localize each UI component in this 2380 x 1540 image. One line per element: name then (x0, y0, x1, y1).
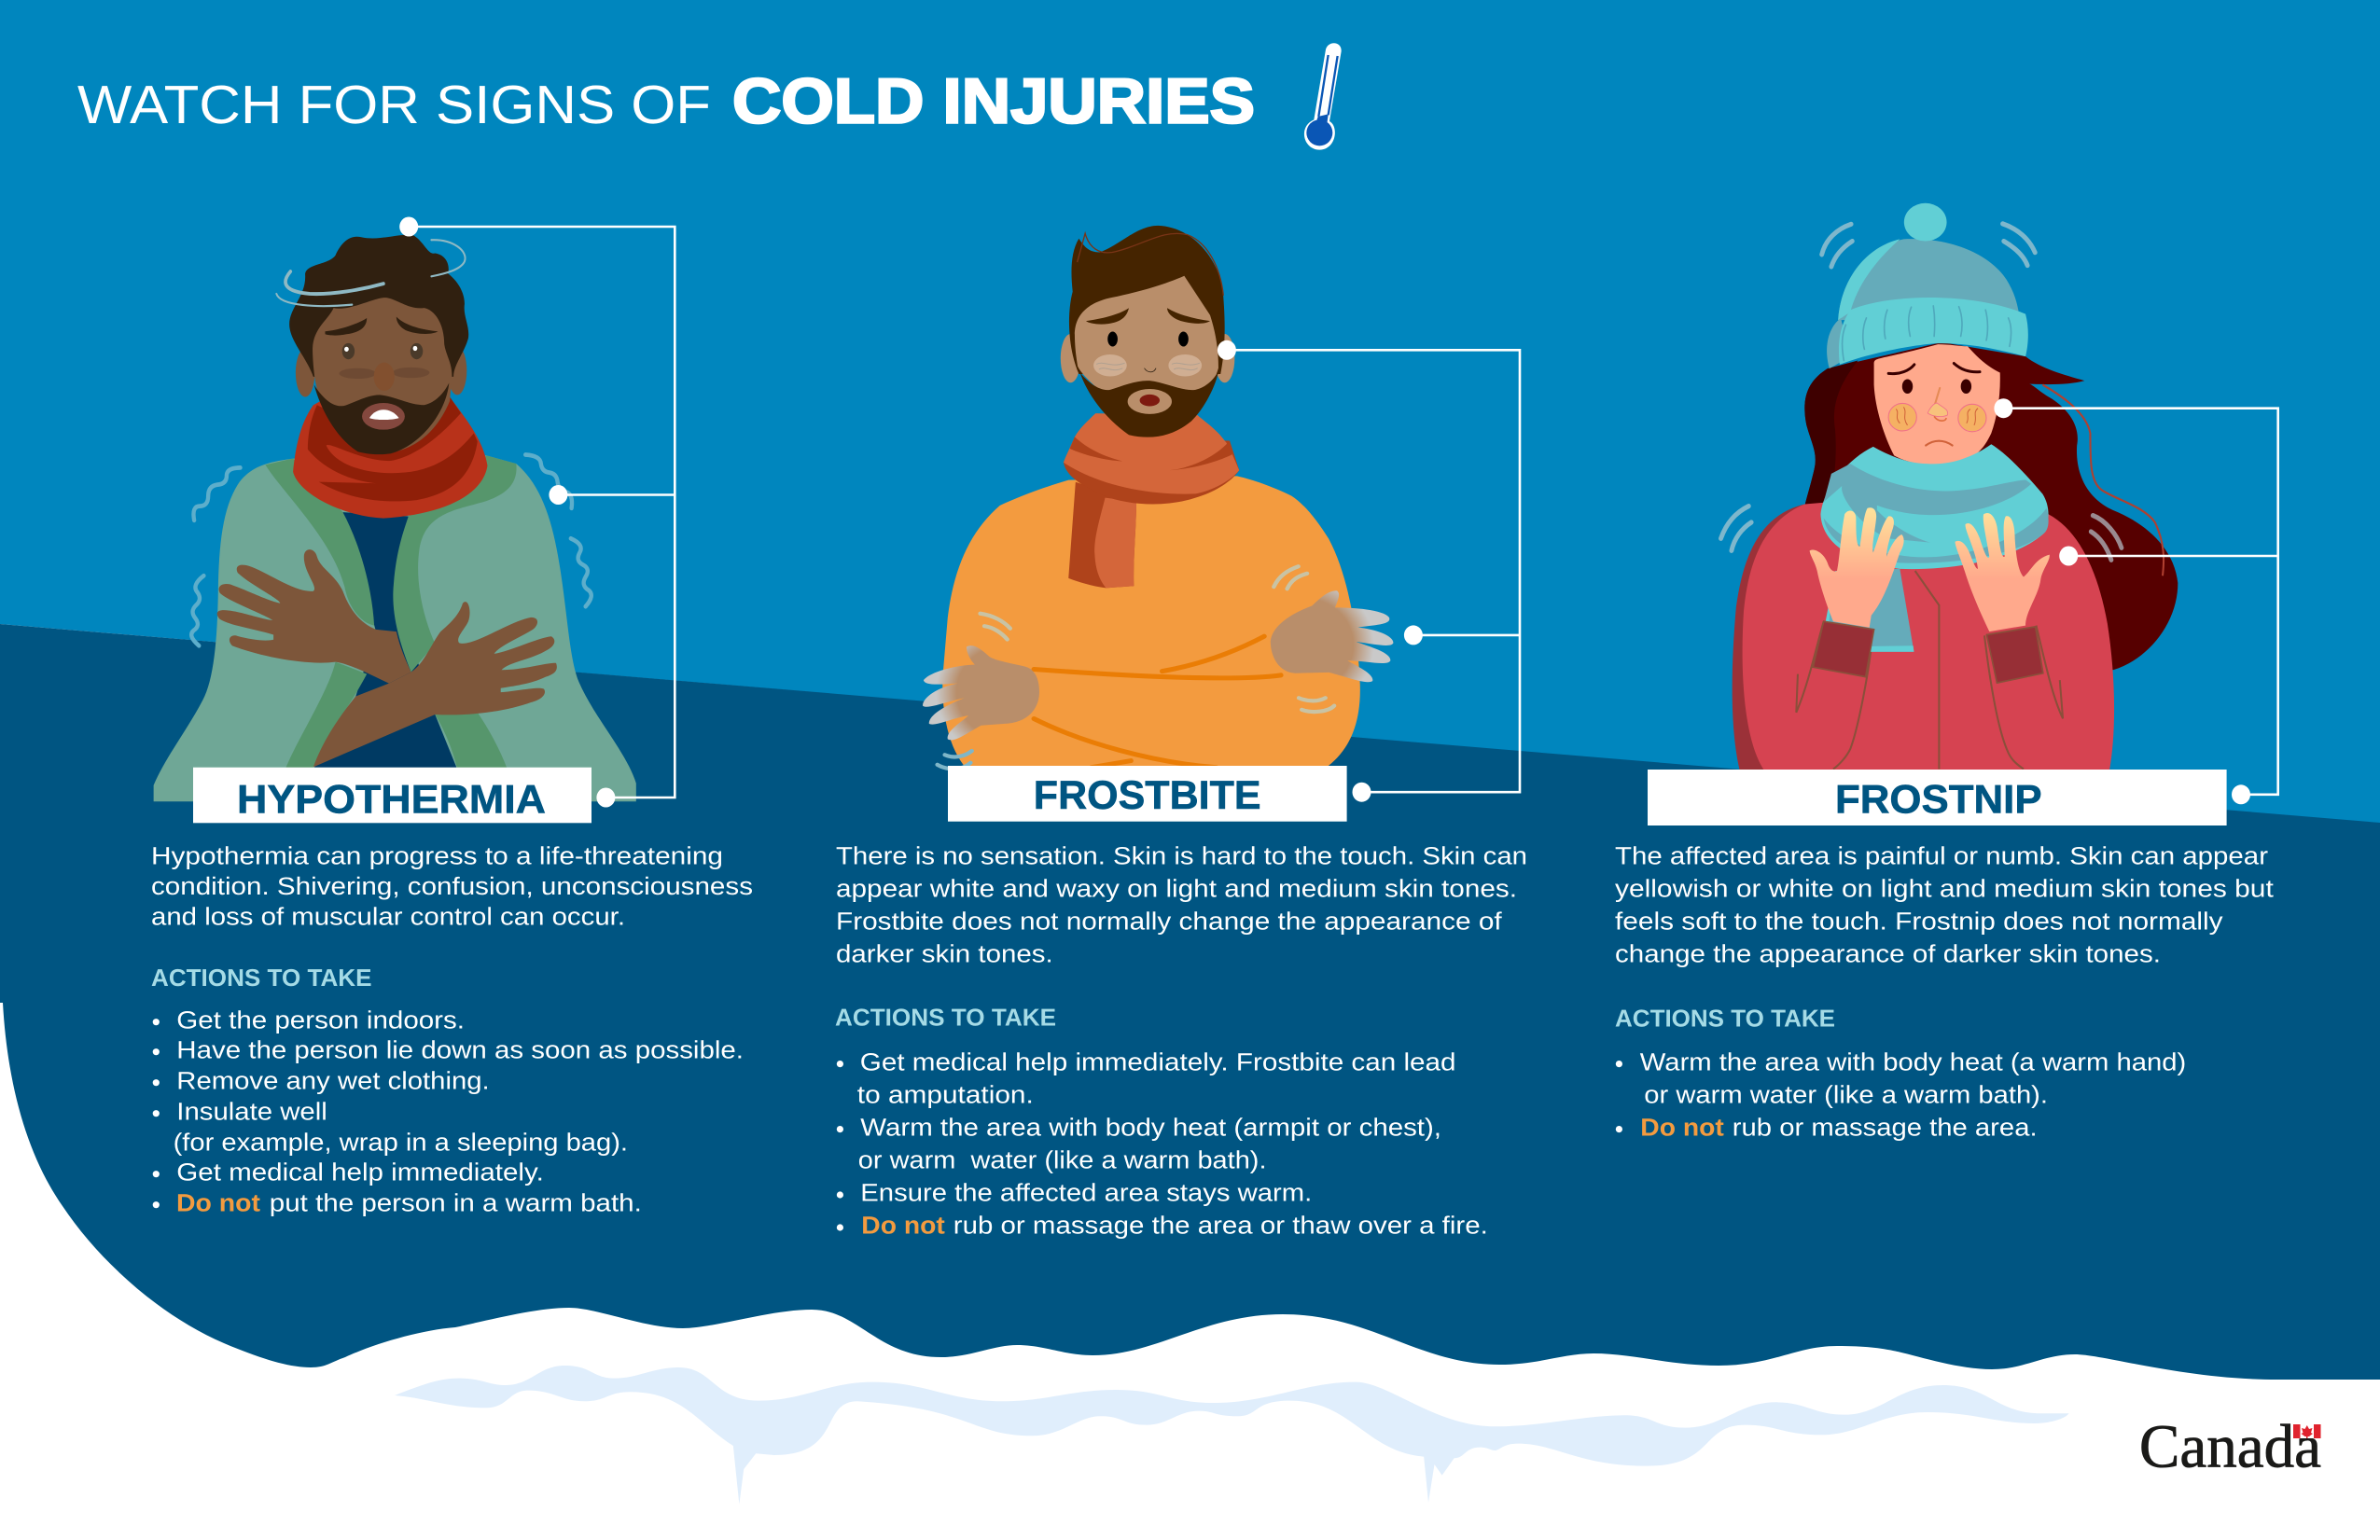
face (1874, 344, 2000, 465)
list: hypothermia actions: Get medical help immediately. (176, 1158, 544, 1186)
connector: frostnip signs (1994, 398, 2278, 804)
scarf tail (1820, 569, 1914, 652)
panel: frostnip heading: FROSTNIP (1835, 778, 2042, 823)
connector: frostbite signs (1218, 340, 1520, 802)
text block: hypothermia description: and loss of muscular control can occur. (151, 903, 625, 931)
frostbitten hands (923, 590, 1393, 740)
heading: hypothermia actions to take: ACTIONS TO TAKE (151, 964, 371, 992)
title: COLD INJURIES (732, 65, 1255, 136)
text block: frostbite description (836, 842, 1527, 968)
shirt (313, 512, 457, 770)
list: hypothermia actions (153, 1006, 744, 1216)
list: hypothermia actions: Remove any wet clothing. (176, 1067, 490, 1095)
shiver marks (1720, 224, 2122, 560)
shiver marks (938, 566, 1334, 769)
knit hat (1827, 203, 2028, 368)
neck scarf (1820, 444, 2049, 569)
icon: thermometer (1304, 43, 1342, 150)
background: dark blue wave panel (0, 624, 2380, 1380)
list: frostbite actions: or warm water (like a warm bath). (858, 1146, 1267, 1174)
illustration: woman with frostnip in hat and scarf (1720, 203, 2178, 771)
text block: frostbite description: appear white and waxy on light and medium skin tones. (836, 875, 1517, 903)
text block: hypothermia description (151, 842, 753, 931)
list: frostbite actions: Get medical help immediately. Frostbite can lead (860, 1047, 1455, 1075)
panel: hypothermia heading (193, 768, 592, 823)
list: hypothermia actions: Get the person indoors. (176, 1006, 465, 1034)
list: frostbite actions: Ensure the affected area stays warm. (860, 1179, 1312, 1207)
illustration: man with frostbite in orange sweater (923, 226, 1393, 769)
icy reflection in snow (395, 1366, 2069, 1505)
list: frostbite actions: Warm the area with body heat (armpit or chest), (860, 1113, 1441, 1141)
list: frostbite actions (837, 1047, 1488, 1240)
blanket trim (265, 455, 517, 769)
heading: frostbite actions to take: ACTIONS TO TAKE (835, 1003, 1056, 1031)
jacket (1733, 494, 2114, 771)
list: hypothermia actions: Have the person lie down as soon as possible. (176, 1035, 744, 1063)
head (1061, 226, 1234, 437)
list: hypothermia actions: put the person in a warm bath. (270, 1188, 642, 1216)
title (77, 65, 1255, 136)
text block: frostbite description: There is no sensation. Skin is hard to the touch. Skin can (836, 842, 1527, 870)
list: frostbite actions: Do not (861, 1212, 945, 1240)
list: frostbite actions: rub or massage the area or thaw over a fire. (953, 1212, 1488, 1240)
panel: hypothermia heading: HYPOTHERMIA (237, 778, 546, 823)
crossed arms and hands (217, 549, 557, 767)
list: frostnip actions: or warm water (like a warm bath). (1644, 1080, 2048, 1108)
text block: frostnip description: feels soft to the touch. Frostnip does not normally (1615, 908, 2223, 936)
list: hypothermia actions: Do not (176, 1188, 260, 1216)
connector: hypothermia signs (399, 216, 675, 808)
panel: frostbite heading: FROSTBITE (1034, 773, 1261, 818)
panel: frostbite heading (948, 766, 1347, 822)
list: hypothermia actions: (for example, wrap in a sleeping bag). (174, 1129, 628, 1157)
list: frostnip actions: Warm the area with body heat (a warm hand) (1640, 1047, 2186, 1075)
blanket (154, 455, 636, 801)
scarf (293, 397, 487, 519)
text block: frostnip description: The affected area is painful or numb. Skin can appear (1615, 842, 2268, 870)
text block: frostnip description (1615, 842, 2275, 968)
text block: hypothermia description: Hypothermia can progress to a life-threatening (151, 842, 723, 870)
heading: frostnip actions to take: ACTIONS TO TAKE (1615, 1005, 1835, 1033)
text block: frostnip description: change the appearance of darker skin tones. (1615, 940, 2161, 968)
text block: hypothermia description: condition. Shivering, confusion, unconsciousness (151, 872, 753, 900)
illustration: man with hypothermia wrapped in blanket (154, 235, 636, 801)
sweater folds (1034, 636, 1281, 768)
logo: Canada wordmark with flag: Canada (2139, 1412, 2321, 1481)
list: frostnip actions (1616, 1047, 2186, 1141)
head (289, 235, 468, 454)
title: WATCH FOR SIGNS OF (77, 75, 711, 135)
text block: frostnip description: yellowish or white on light and medium skin tones but (1615, 875, 2275, 903)
scarf (1064, 413, 1239, 588)
hair (1804, 342, 2178, 670)
list: hypothermia actions: Insulate well (176, 1097, 327, 1125)
dizziness lines (276, 240, 466, 306)
panel: frostnip heading (1648, 770, 2227, 825)
text block: frostbite description: Frostbite does not normally change the appearance of (836, 908, 1502, 936)
hands with pale fingertips (1810, 507, 2050, 631)
jacket cuffs (1813, 621, 2043, 683)
list: frostnip actions: rub or massage the area. (1733, 1113, 2038, 1141)
shiver marks (191, 455, 592, 645)
list: frostbite actions: to amputation. (857, 1080, 1034, 1108)
list: frostnip actions: Do not (1640, 1113, 1724, 1141)
text block: frostbite description: darker skin tones. (836, 940, 1053, 968)
sweater (942, 476, 1360, 769)
background: upper blue sky (0, 0, 2380, 824)
